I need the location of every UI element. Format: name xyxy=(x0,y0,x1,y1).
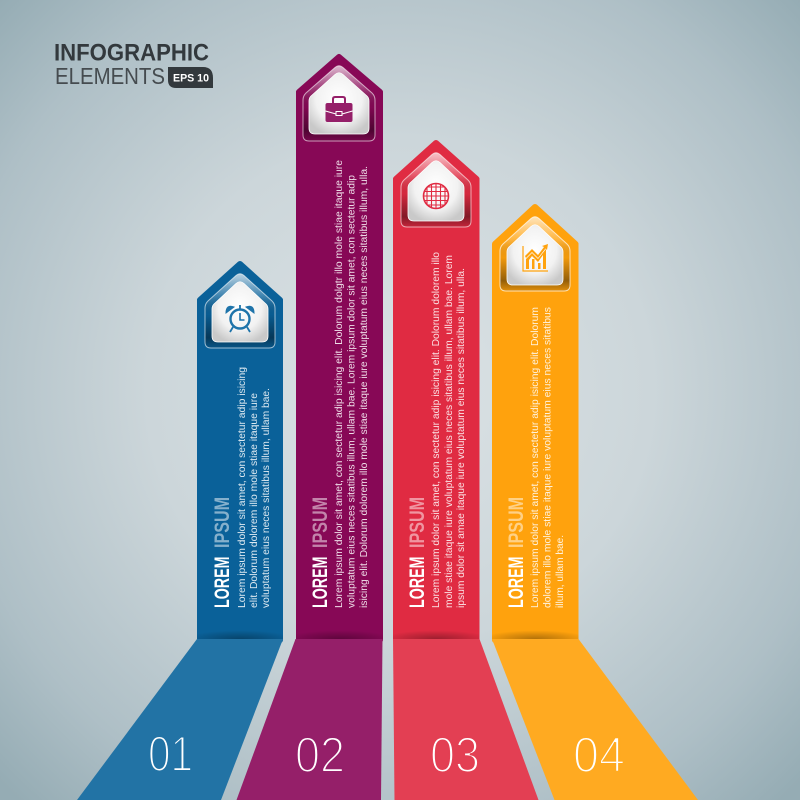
heading: IPSUM xyxy=(309,497,332,548)
title line: elements: ELEMENTS xyxy=(55,63,165,89)
text block: Lorem ipsum dolor sit amet, con sectetur adip isicing elit. Dolorum dolorem illo xyxy=(431,252,442,608)
icon badge: globe xyxy=(401,153,471,227)
badge face xyxy=(309,73,369,134)
title line: infographic: INFOGRAPHIC xyxy=(54,40,209,66)
heading: IPSUM xyxy=(505,497,528,548)
floor strip xyxy=(492,639,698,800)
heading xyxy=(309,497,332,608)
text block: elit. Dolorum dolorem illo mole stiae itaque iure xyxy=(249,393,260,608)
panel: 04 orange arrow xyxy=(492,207,698,800)
badge frame xyxy=(500,217,570,291)
heading: IPSUM xyxy=(406,497,429,548)
heading xyxy=(211,497,234,608)
icon badge: chart xyxy=(500,217,570,291)
heading: LOREM xyxy=(309,556,332,608)
text block: Lorem ipsum dolor sit amet, con sectetur adip isicing xyxy=(237,367,248,608)
number: 04 xyxy=(573,727,625,783)
heading xyxy=(505,497,528,608)
floor strip xyxy=(77,639,283,800)
badge frame xyxy=(205,274,275,348)
arrow body xyxy=(200,264,280,640)
text block: dolorem illo mole stiae itaque iure voluptatum eius neces sitatibus xyxy=(542,307,554,608)
heading: LOREM xyxy=(505,556,528,608)
text block xyxy=(334,160,370,608)
heading xyxy=(406,497,429,608)
badge: eps 10 xyxy=(168,67,213,88)
heading: LOREM xyxy=(406,556,429,608)
arrow body xyxy=(396,143,476,640)
heading: LOREM xyxy=(211,556,234,608)
floor strip xyxy=(236,639,382,800)
panel: 03 red arrow xyxy=(393,143,538,800)
badge frame xyxy=(401,153,471,227)
text block xyxy=(530,307,566,608)
text block xyxy=(431,252,467,608)
number: 03 xyxy=(430,727,480,783)
icon: chart xyxy=(523,244,548,271)
icon badge: briefcase xyxy=(303,66,375,141)
icon: clock xyxy=(226,305,254,332)
panel: 01 blue arrow xyxy=(77,264,283,800)
bottom shadow xyxy=(197,625,283,639)
badge: eps 10: EPS 10 xyxy=(173,72,209,84)
text block: illum, ullam bae. xyxy=(555,535,566,608)
badge face xyxy=(408,161,464,221)
icon badge: alarm clock xyxy=(205,274,275,348)
badge face xyxy=(212,282,268,342)
text block: voluptatum eius neces sitatibus illum, ullam bae. xyxy=(261,388,272,608)
number: 02 xyxy=(295,727,345,783)
icon: briefcase xyxy=(326,97,352,122)
text block: voluptatum eius neces sitatibus illum, ullam bae. Lorem ipsum dolor sit amet, con sectetur adip xyxy=(346,175,358,608)
text block xyxy=(237,367,272,608)
text block: ipsum dolor sit amae itaque iure voluptatum eius neces sitatibus illum, ulla. xyxy=(456,268,467,608)
bottom shadow xyxy=(393,625,479,639)
text block: Lorem ipsum dolor sit amet, con sectetur adip isicing elit. Dolorum dolgtr illo mole stiae itaque iure xyxy=(334,160,345,608)
bottom shadow xyxy=(296,625,383,639)
panel: 02 purple arrow xyxy=(236,57,383,800)
arrow body xyxy=(299,57,380,640)
arrow body xyxy=(495,207,576,640)
floor strip xyxy=(393,639,538,800)
bottom shadow xyxy=(492,625,578,639)
badge face xyxy=(507,225,563,285)
number: 01 xyxy=(148,726,193,782)
text block: isicing elit. Dolorum dolorem illo mole stiae itaque iure voluptatum eius neces sitatibus illum, ulla. xyxy=(359,166,370,608)
heading: IPSUM xyxy=(211,497,234,548)
text block: Lorem ipsum dolor sit amet, con sectetur adip isicing elit. Dolorum xyxy=(530,307,541,608)
text block: mole stiae itaque iure voluptatum eius neces sitatibus illum, ullam bae. Lorem xyxy=(444,255,455,608)
badge frame xyxy=(303,66,375,141)
title xyxy=(54,40,213,89)
icon: globe xyxy=(424,184,448,208)
